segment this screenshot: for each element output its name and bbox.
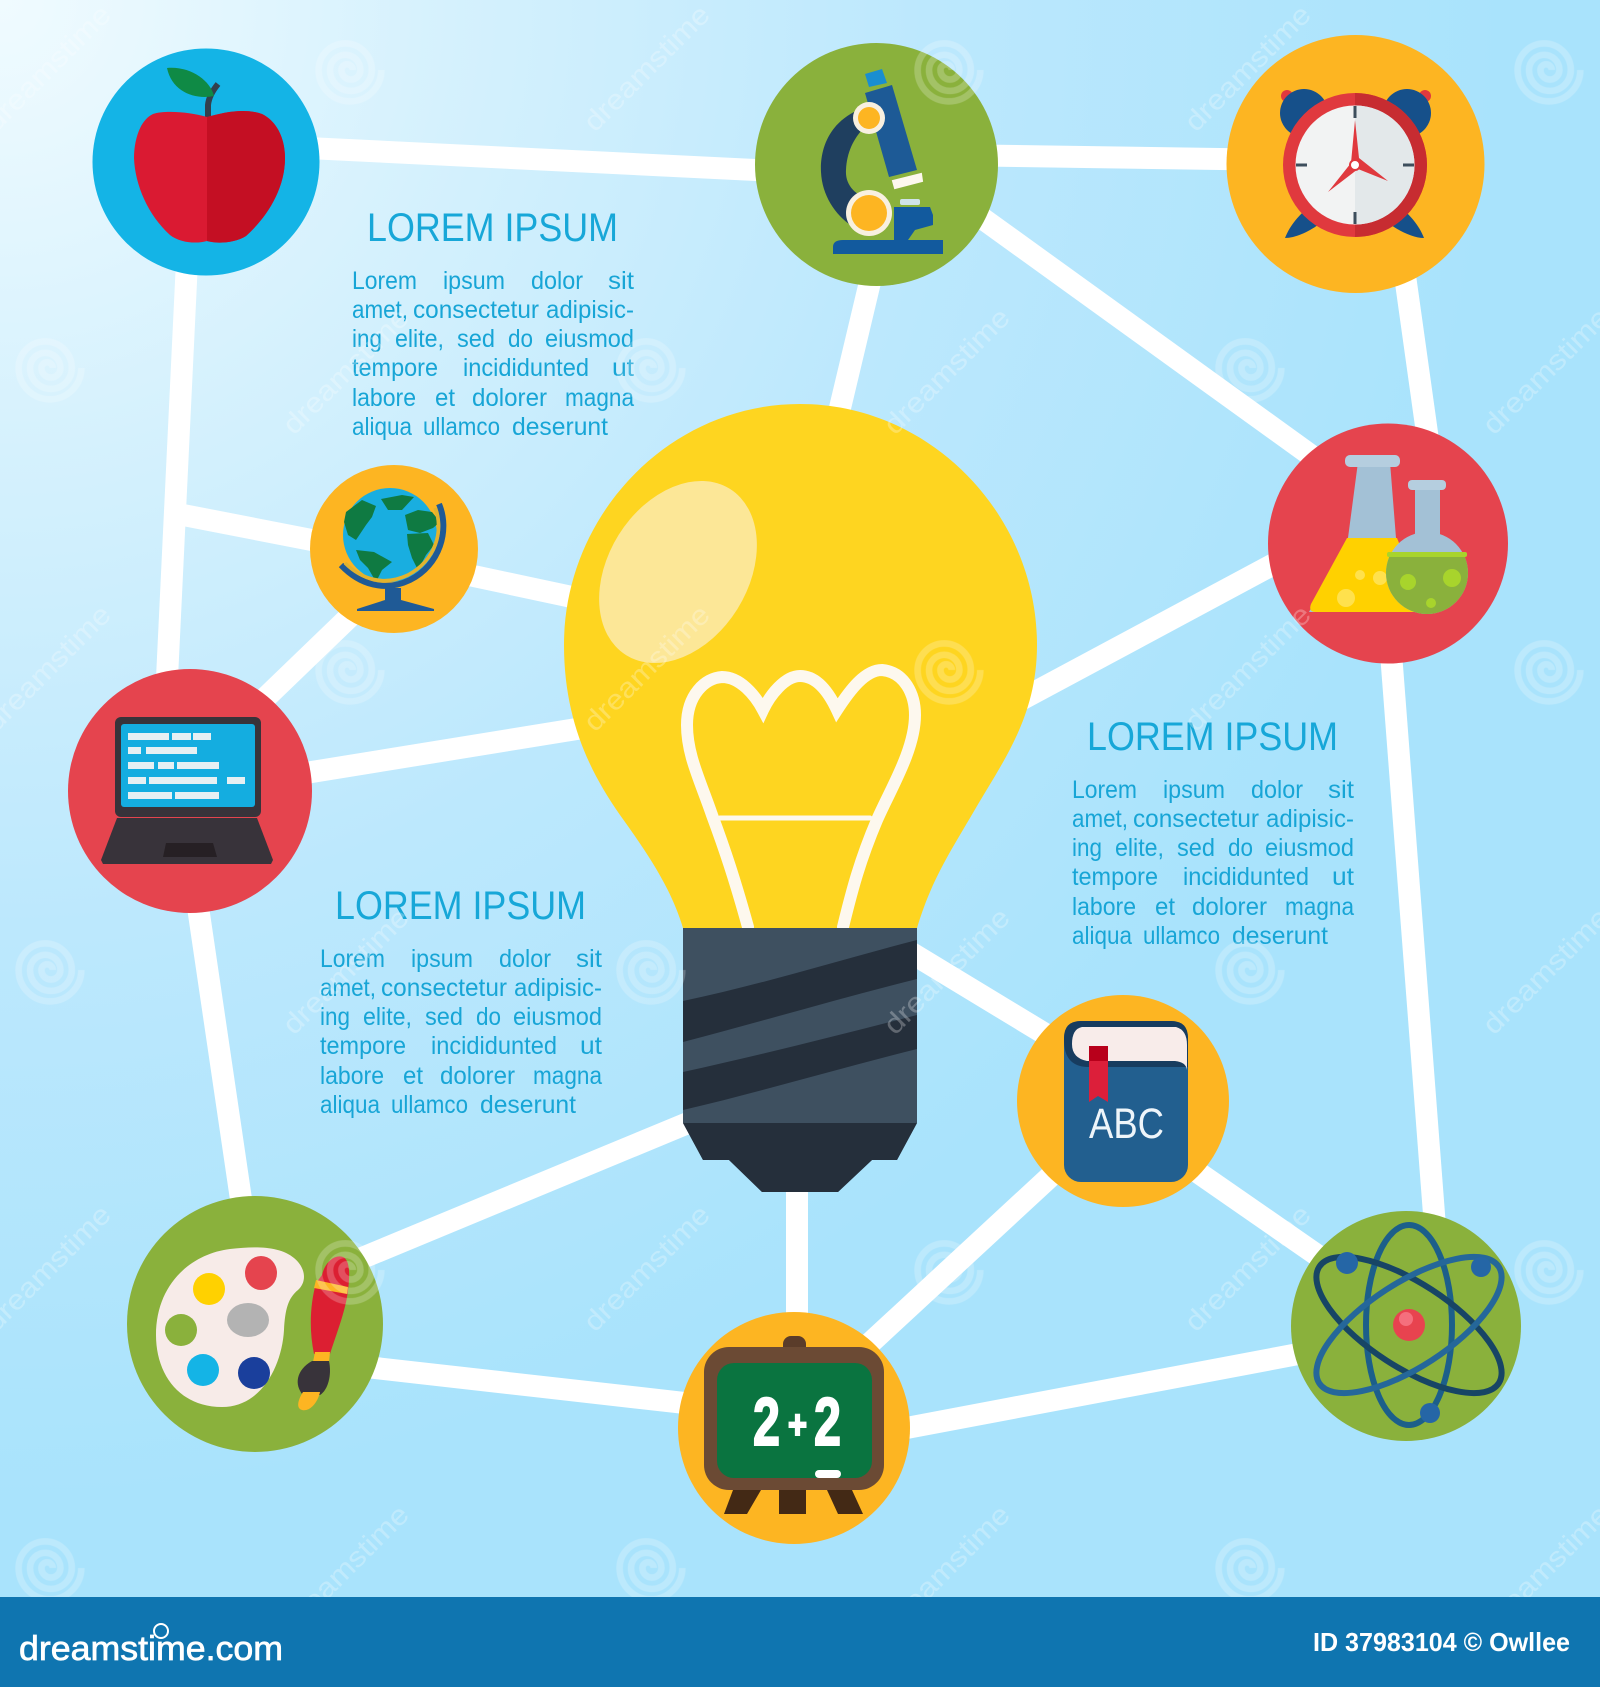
screw base [683, 928, 917, 1192]
icon: globe [310, 465, 478, 633]
body copy: elite, [1115, 834, 1164, 862]
body copy: tempore [1072, 863, 1158, 891]
body copy: Lorem [1072, 776, 1137, 804]
watermark spirals and stock text: dreamstime [276, 302, 415, 440]
body copy: ipsum [1163, 776, 1225, 804]
body copy: incididunted [463, 354, 589, 382]
icon: painter palette [127, 1196, 383, 1452]
body copy: ut [580, 1032, 602, 1060]
body copy: et [1155, 893, 1175, 921]
footer bar [0, 1597, 1600, 1687]
body copy: ullamco [391, 1091, 468, 1119]
body copy: sed [1177, 834, 1215, 862]
body copy: dolor [531, 267, 583, 295]
body copy: eiusmod [1265, 834, 1354, 862]
icon: book: ABC [1089, 1100, 1164, 1148]
body copy: aliqua [352, 413, 412, 441]
bulb glass [564, 404, 1037, 928]
watermark spirals and stock text: dreamstime [577, 599, 716, 737]
body copy: adipisic- [514, 974, 602, 1002]
heading: LOREM IPSUM [1087, 715, 1338, 759]
text block: top [352, 206, 634, 441]
watermark spirals and stock text: dreamstime [276, 902, 415, 1040]
body copy [1072, 776, 1354, 950]
body copy: sed [425, 1003, 463, 1031]
body copy: amet, [352, 296, 408, 324]
body copy: ipsum [411, 945, 473, 973]
body copy: labore [1072, 893, 1136, 921]
icon: flasks [1268, 424, 1508, 664]
filament [687, 670, 915, 927]
body copy: ut [1332, 863, 1354, 891]
body copy: dolorer [472, 384, 547, 412]
body copy: ut [612, 354, 634, 382]
watermark spirals and stock text: dreamstime [877, 1499, 1016, 1637]
body copy: magna [533, 1062, 602, 1090]
body copy: eiusmod [513, 1003, 602, 1031]
body copy: et [403, 1062, 423, 1090]
body copy: adipisic- [546, 296, 634, 324]
body copy: incididunted [431, 1032, 557, 1060]
body copy: dolorer [440, 1062, 515, 1090]
body copy: incididunted [1183, 863, 1309, 891]
body copy: deserunt [480, 1091, 576, 1119]
watermark spirals and stock text: dreamstime [276, 1499, 415, 1637]
body copy: tempore [320, 1032, 406, 1060]
body copy [352, 267, 634, 441]
watermark spirals and stock text: dreamstime [1178, 1199, 1317, 1337]
body copy: ing [352, 325, 382, 353]
body copy: amet, [1072, 805, 1128, 833]
icon: alarm clock [1226, 35, 1484, 293]
body copy [320, 945, 602, 1119]
icon: microscope [755, 43, 998, 286]
text block: right [1072, 715, 1354, 950]
body copy: et [435, 384, 455, 412]
body copy: sit [608, 267, 634, 295]
body copy: labore [320, 1062, 384, 1090]
body copy: ing [320, 1003, 350, 1031]
watermark spirals and stock text: dreamstime [577, 0, 716, 137]
body copy: magna [565, 384, 634, 412]
icon: atom [1291, 1211, 1522, 1441]
watermark spirals and stock text: dreamstime [877, 302, 1016, 440]
body copy: tempore [352, 354, 438, 382]
body copy: do [508, 325, 533, 353]
body copy: elite, [363, 1003, 412, 1031]
body copy: ing [1072, 834, 1102, 862]
body copy: labore [352, 384, 416, 412]
body copy: aliqua [320, 1091, 380, 1119]
icon: chalkboard: 2 [753, 1384, 780, 1460]
body copy: aliqua [1072, 922, 1132, 950]
watermark spirals and stock text: dreamstime [1178, 0, 1317, 137]
connector lines [165, 143, 1436, 1433]
body copy: Lorem [320, 945, 385, 973]
body copy: do [1228, 834, 1253, 862]
bulb highlight [567, 452, 789, 692]
body copy: sed [457, 325, 495, 353]
body copy: dolorer [1192, 893, 1267, 921]
icon: chalkboard [678, 1312, 910, 1544]
central light bulb [564, 404, 1037, 1192]
body copy: magna [1285, 893, 1354, 921]
watermark spirals and stock text: dreamstime [1476, 1499, 1600, 1637]
heading: LOREM IPSUM [335, 884, 586, 928]
text block: lower left [320, 884, 602, 1119]
body copy: dolor [499, 945, 551, 973]
watermark spirals and stock text: dreamstime [577, 1199, 716, 1337]
watermark spirals and stock text: dreamstime [877, 902, 1016, 1040]
icon: apple [92, 48, 320, 276]
body copy: amet, [320, 974, 376, 1002]
body copy: deserunt [512, 413, 608, 441]
body copy: consectetur [381, 974, 507, 1002]
body copy: eiusmod [545, 325, 634, 353]
body copy: consectetur [1133, 805, 1259, 833]
heading: LOREM IPSUM [367, 206, 618, 250]
body copy: ullamco [1143, 922, 1220, 950]
icon: laptop [68, 669, 312, 913]
body copy: deserunt [1232, 922, 1328, 950]
image id: ID 37983104 © Owllee [1313, 1627, 1570, 1657]
body copy: sit [576, 945, 602, 973]
watermark spirals and stock text: dreamstime [1476, 302, 1600, 440]
footer logo: dreamstime.com [19, 1630, 283, 1668]
body copy: ipsum [443, 267, 505, 295]
body copy: do [476, 1003, 501, 1031]
icon: chalkboard: 2 [814, 1384, 841, 1460]
body copy: Lorem [352, 267, 417, 295]
body copy: consectetur [413, 296, 539, 324]
body copy: sit [1328, 776, 1354, 804]
icon: book [1017, 995, 1229, 1207]
body copy: elite, [395, 325, 444, 353]
body copy: ullamco [423, 413, 500, 441]
body copy: dolor [1251, 776, 1303, 804]
watermark spirals and stock text: dreamstime [1476, 902, 1600, 1040]
body copy: adipisic- [1266, 805, 1354, 833]
watermark spirals and stock text: dreamstime [1178, 599, 1317, 737]
icon: chalkboard: + [788, 1403, 807, 1447]
